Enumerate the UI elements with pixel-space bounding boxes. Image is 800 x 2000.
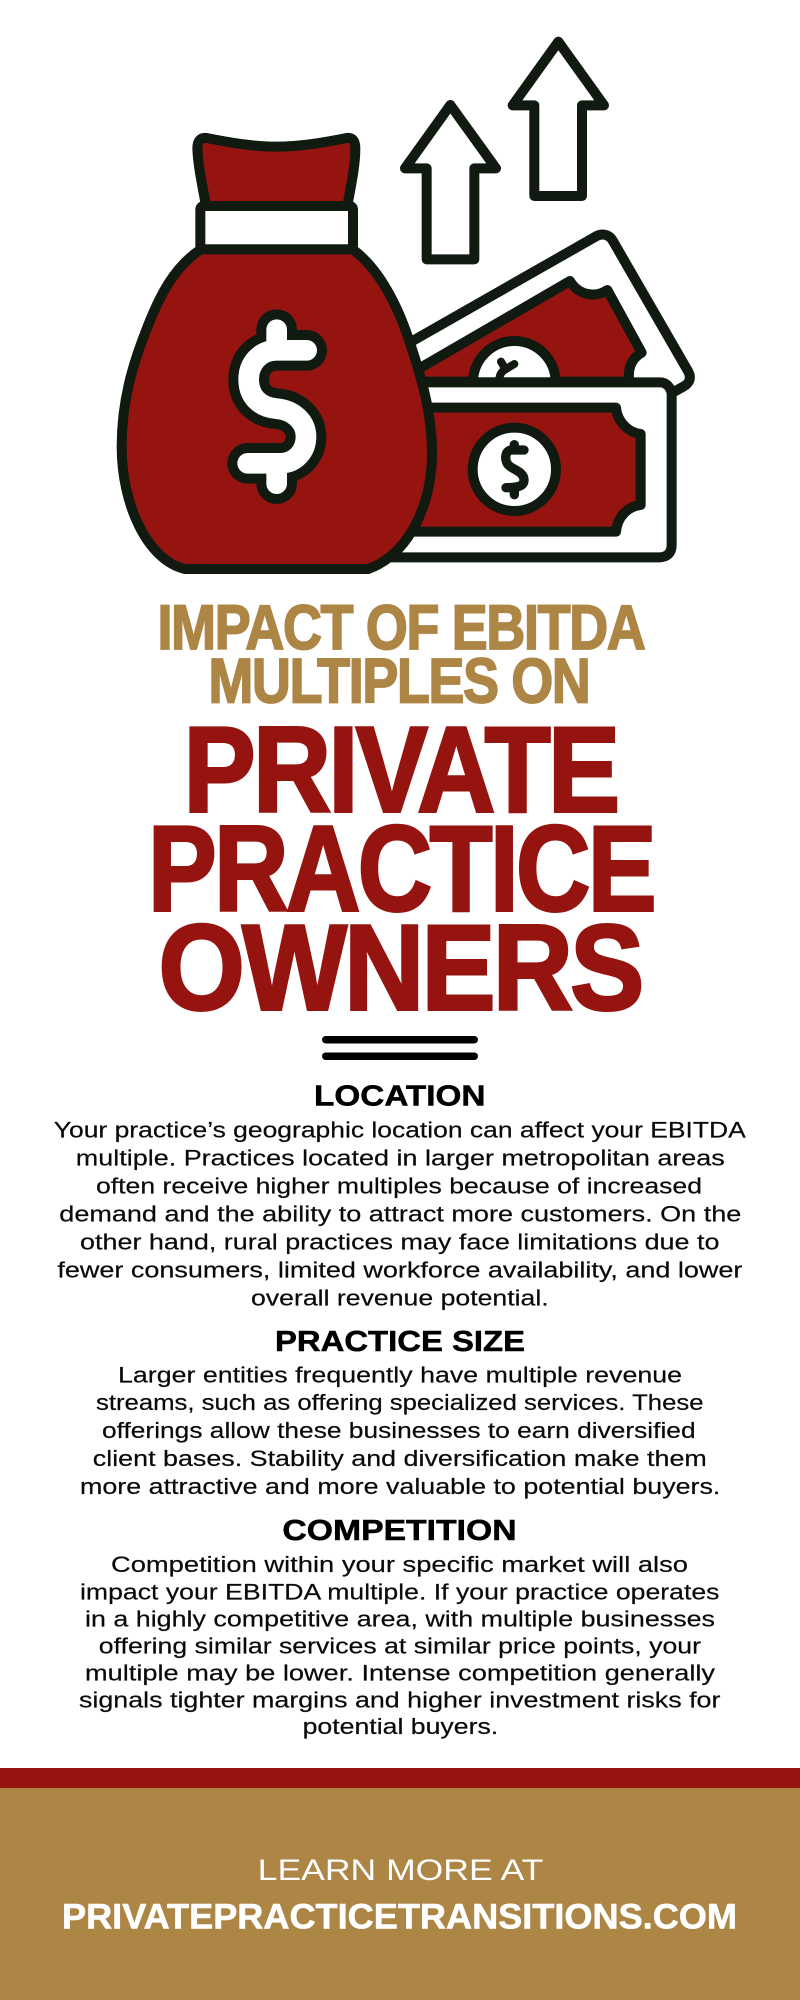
panel: practice size <box>80 1326 720 1499</box>
text block: competition: potential buyers. <box>303 1714 498 1739</box>
text block: location <box>54 1117 746 1310</box>
text block: competition: impact your EBITDA multiple. If your practice operates <box>80 1579 720 1604</box>
text block: practice size: Larger entities frequently have multiple revenue <box>118 1362 682 1387</box>
text block: competition: multiple may be lower. Intense competition generally <box>85 1661 715 1686</box>
text block: location: often receive higher multiples because of increased <box>96 1173 702 1198</box>
panel: location <box>54 1081 746 1310</box>
headline line 3: OWNERS <box>158 899 642 1035</box>
text block: competition: offering similar services at similar price points, your <box>99 1633 701 1658</box>
icon: bag collar <box>200 206 353 249</box>
icon: money bag, banknotes and rising arrows <box>122 42 690 569</box>
text block: practice size: streams, such as offering specialized services. These <box>96 1390 704 1415</box>
text block: competition: Competition within your specific market will also <box>111 1552 688 1577</box>
text block: competition: in a highly competitive area, with multiple businesses <box>85 1606 715 1631</box>
icon: back banknote <box>407 234 690 420</box>
title <box>148 593 654 1035</box>
footer red band <box>0 1768 800 1788</box>
icon: dollar sign on bag <box>248 330 307 484</box>
text block: location: overall revenue potential. <box>251 1285 549 1310</box>
icon: money bag <box>122 138 432 569</box>
text block: practice size <box>80 1362 720 1499</box>
subtitle line 2: MULTIPLES ON <box>208 647 590 717</box>
divider <box>322 1036 478 1060</box>
call to action: LEARN MORE AT <box>258 1854 543 1887</box>
panel: competition <box>79 1515 720 1739</box>
heading: location: LOCATION <box>314 1081 486 1113</box>
icon: banknotes <box>387 234 690 557</box>
text block: practice size: offerings allow these businesses to earn diversified <box>102 1418 696 1443</box>
text block: practice size: client bases. Stability and diversification make them <box>93 1446 707 1471</box>
heading: practice size: PRACTICE SIZE <box>275 1326 525 1358</box>
subtitle line 1: IMPACT OF EBITDA <box>158 593 644 663</box>
icon: bag neck <box>197 138 355 206</box>
text block: location: fewer consumers, limited workforce availability, and lower <box>57 1257 742 1282</box>
text block: competition <box>79 1552 720 1739</box>
text block: competition: signals tighter margins and higher investment risks for <box>79 1687 720 1712</box>
icon: bag body <box>122 249 432 569</box>
text block: practice size: more attractive and more valuable to potential buyers. <box>80 1474 720 1499</box>
footer gold panel <box>0 1788 800 2000</box>
website url: PRIVATEPRACTICETRANSITIONS.COM <box>62 1897 737 1936</box>
icon: front banknote <box>387 382 672 557</box>
text block: location: Your practice’s geographic location can affect your EBITDA <box>54 1117 746 1142</box>
footer <box>0 1768 800 2000</box>
text block: location: multiple. Practices located in larger metropolitan areas <box>76 1145 725 1170</box>
headline line 2: PRACTICE <box>148 801 654 937</box>
headline line 1: PRIVATE <box>184 702 618 838</box>
text block: location: demand and the ability to attract more customers. On the <box>59 1201 741 1226</box>
icon: rising arrows <box>405 42 604 259</box>
heading: competition: COMPETITION <box>282 1515 517 1547</box>
text block: location: other hand, rural practices may face limitations due to <box>80 1229 720 1254</box>
